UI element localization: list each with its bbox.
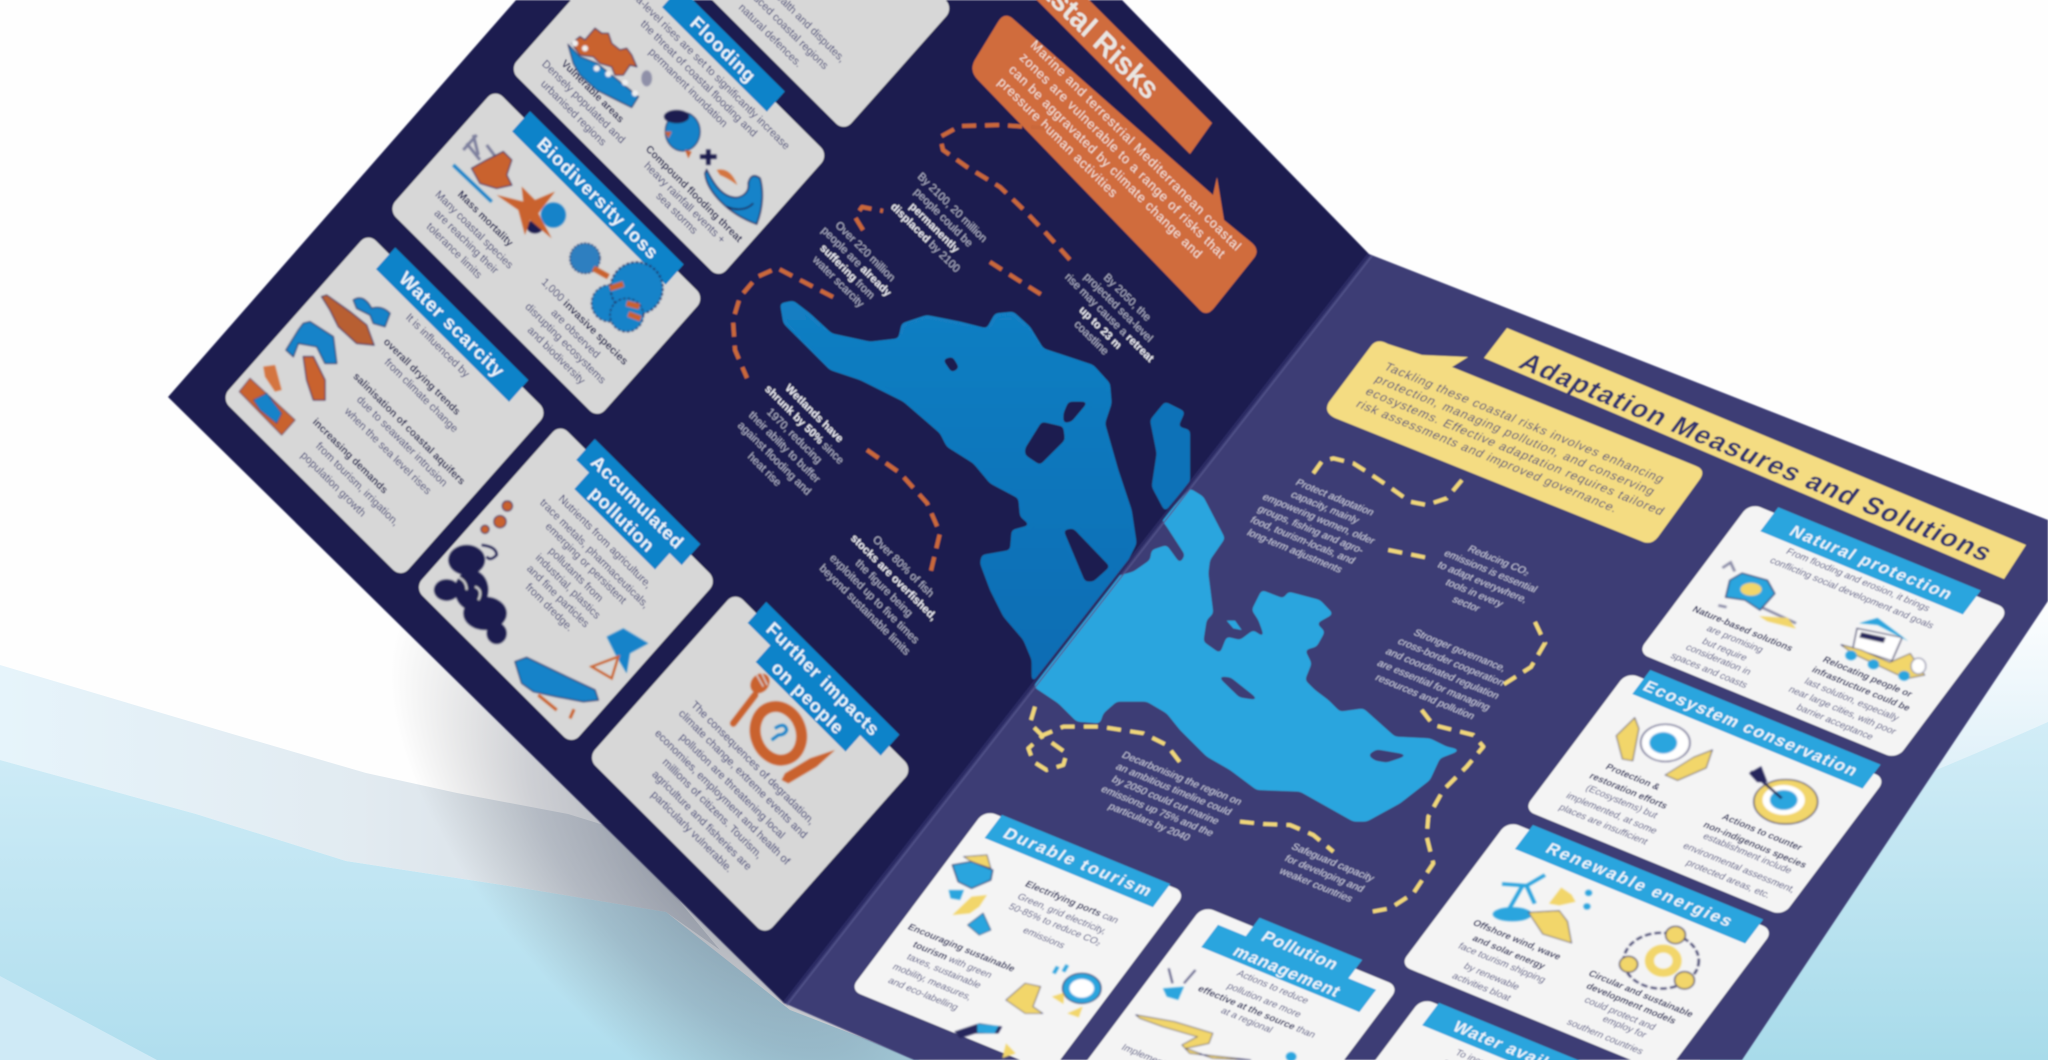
- card: Flooding: urbanised regions: [538, 78, 609, 149]
- card: Flooding: [509, 0, 838, 278]
- icon: walking tail: [954, 1023, 1016, 1058]
- stat: water scarcity: water scarcity: [810, 253, 866, 311]
- card: Further impacts on people: The consequences of degradation,: [689, 699, 816, 827]
- stat: wetlands: heat rise: [745, 450, 783, 489]
- stat: overfishing: Over 80% of fish: [870, 534, 936, 600]
- card: Further impacts on people: climate change, extreme events and: [676, 708, 809, 841]
- text: safeguard: weaker countries: [1276, 866, 1355, 904]
- intro box: orange: [972, 16, 1257, 313]
- card: Pollution management: pollution are more: [1224, 981, 1304, 1020]
- text: reducing emissions: sector: [1450, 595, 1483, 614]
- card: Renewable energies: southern countries: [1564, 1017, 1646, 1057]
- card: Renewable energies: activities bloat: [1449, 971, 1513, 1004]
- icon: plastic bottle: [515, 657, 598, 718]
- text: decarbonising: particulars by 2040: [1106, 802, 1192, 843]
- background: right blue swoosh: [1700, 722, 2048, 1060]
- icons: Flooding: [568, 28, 762, 224]
- text: safeguard: [1272, 842, 1377, 907]
- card: Accumulated pollution: from dredge.: [523, 581, 575, 634]
- card: Ecosystem conservation: non-indigenous species: [1701, 820, 1809, 871]
- card: Further impacts on people: particularly vulnerable.: [649, 789, 734, 875]
- stat: water scarcity: [801, 214, 903, 320]
- card: Natural protection: Relocating people or: [1820, 655, 1915, 700]
- text: protect capacity: food, tourism-locals, and: [1248, 515, 1357, 566]
- card: Ecosystem conservation: Actions to counter: [1719, 812, 1805, 853]
- card: Ecosystem conservation: protected areas, etc.: [1683, 858, 1773, 901]
- text: decarbonising: [1087, 750, 1244, 851]
- card: Renewable energies: and solar energy: [1470, 934, 1548, 972]
- ribbon: Flooding: [662, 0, 785, 112]
- stat: displaced people: By 2100, 20 million: [915, 170, 989, 245]
- map: right-page coastline: [1028, 458, 1483, 913]
- book cast shadow: [0, 300, 1100, 1060]
- dashed connector: upper right: [1498, 622, 1545, 688]
- card: Water availability: [1314, 996, 1682, 1060]
- icon: invasive lionfish: [570, 243, 663, 332]
- title ribbon: Adaptation Measures and Solutions: Adaptation Measures and Solutions: [1513, 348, 1998, 567]
- card: Natural protection: near large cities, with poor: [1786, 685, 1899, 737]
- stat: displaced people: [888, 170, 989, 275]
- card: Ecosystem conservation: environmental assessment,: [1680, 841, 1797, 895]
- text: decarbonising: emissions up 75% and the: [1098, 785, 1216, 839]
- text: protect capacity: empowering women, older: [1260, 492, 1378, 547]
- stat: water scarcity: suffering from: [818, 242, 877, 302]
- card: Further impacts on people: millions of citizens. Tourism,: [660, 756, 764, 861]
- card: Further impacts on people: agriculture and fisheries are: [649, 768, 753, 873]
- card: Water scarcity: overall drying trends: [381, 336, 463, 418]
- stat: overfishing: the figure being: [853, 557, 915, 620]
- ribbon: Renewable energies: Renewable energies: [1542, 840, 1736, 930]
- icon: circular economy gear: [1620, 926, 1699, 989]
- background band: pale left swoosh: [0, 665, 720, 950]
- text: decarbonising: an ambitious timeline could: [1113, 762, 1234, 818]
- card: Durable tourism: mobility, measures,: [890, 962, 974, 1003]
- stat: wetlands: Wetlands have: [783, 382, 845, 445]
- card: Accumulated pollution: [415, 414, 726, 745]
- card: Renewable energies: Circular and sustainable: [1586, 969, 1695, 1020]
- icon: cube and lightning: [949, 855, 993, 935]
- card: Pollution management: [1065, 897, 1406, 1060]
- card: Flooding: sea storms: [654, 190, 700, 237]
- card: Flooding: heavy rainfall events +: [642, 160, 727, 246]
- card: Ecosystem conservation: (Ecosystems) but: [1583, 783, 1660, 821]
- icon: fork: [733, 670, 773, 723]
- panel: left page: [168, 0, 1369, 1003]
- card: Flooding: Vulnerable areas: [559, 58, 626, 126]
- intro text: zones are vulnerable to a range of risks that: [1017, 49, 1228, 261]
- card: Durable tourism: [850, 808, 1187, 1060]
- stat: coastal retreat: up to 23 m: [1077, 304, 1124, 352]
- stat: wetlands: their ability to buffer: [746, 409, 822, 486]
- icon: storm cloud: [664, 110, 700, 158]
- stat: overfishing: exploited up to five times: [827, 552, 921, 647]
- card: Natural protection: are promising: [1704, 624, 1765, 655]
- text: safeguard: for developing and: [1282, 854, 1366, 895]
- card: Ecosystem conservation: restoration efforts: [1587, 771, 1670, 811]
- card: Flooding: Flooding: [687, 12, 760, 87]
- icon: dry soil frame: [239, 378, 295, 435]
- text: governance: Stronger governance,: [1411, 628, 1508, 674]
- stat: wetlands: shrunk by 50% since: [762, 383, 846, 467]
- ribbon: Pollution management: Pollution: [1258, 928, 1343, 973]
- icon: bleached coral: [453, 135, 512, 202]
- card: top cropped: natural defences.: [736, 2, 804, 70]
- card: Durable tourism: Green, grid electricity,: [1015, 892, 1109, 937]
- card: Water scarcity: from tourism, irrigation,: [313, 440, 401, 529]
- icon: puzzle with leaf: [1718, 562, 1796, 629]
- card: Accumulated pollution: Nutrients from agriculture,: [556, 493, 654, 591]
- card: Ecosystem conservation: [1524, 663, 1893, 916]
- card: Renewable energies: development models: [1584, 981, 1678, 1026]
- icon: target and arrow: [1749, 766, 1818, 824]
- card: Durable tourism: Encouraging sustainable: [905, 922, 1017, 974]
- card: Natural protection: consideration in: [1683, 643, 1753, 677]
- ribbon: Natural protection: [1760, 507, 1981, 614]
- card: Durable tourism: and eco-labelling: [885, 976, 961, 1013]
- ribbon: Natural protection: Natural protection: [1786, 522, 1956, 603]
- card: Flooding: permanent inundation: [646, 46, 729, 130]
- icon: plate: [748, 700, 809, 767]
- stat: wetlands: 1970, reducing: [764, 406, 824, 466]
- text: governance: resources and pollution: [1373, 673, 1477, 722]
- card: Further impacts on people: [588, 581, 923, 935]
- text: governance: are essential for managing: [1375, 659, 1493, 713]
- card: Durable tourism: Electrifying ports can: [1022, 879, 1121, 926]
- card: Renewable energies: Offshore wind, wave: [1470, 918, 1563, 962]
- card: Natural protection: [1638, 497, 2013, 759]
- ribbon: Water availability: [1422, 1003, 1666, 1060]
- text: protect capacity: capacity, mainly: [1288, 490, 1362, 526]
- text: reducing emissions: to adapt everywhere,: [1435, 560, 1529, 605]
- card: Pollution management: effective at the source than: [1195, 984, 1318, 1040]
- text: governance: cross-border cooperation: [1395, 637, 1506, 689]
- background band: blue lower left: [0, 760, 920, 1060]
- ribbon: Renewable energies: [1515, 825, 1763, 944]
- intro text: risk assessments and improved governance.: [1353, 397, 1621, 515]
- icons: Accumulated pollution and Further impacts: [434, 501, 835, 783]
- card: Renewable energies: [1400, 816, 1777, 1060]
- card: Water scarcity: population growth: [298, 449, 368, 520]
- ribbon: Accumulated pollution: pollution: [586, 482, 659, 557]
- card: Further impacts on people: economies, employment and health of: [652, 727, 792, 868]
- stat: overfishing: [817, 519, 951, 658]
- card: Durable tourism: tourism with green: [910, 940, 994, 981]
- icon: starfish: [497, 187, 566, 238]
- intro text: Marine and terrestrial Mediterranean coastal: [1028, 37, 1244, 254]
- icon: chemical splash: [592, 628, 648, 678]
- card: Accumulated pollution: pollutants from: [546, 545, 605, 605]
- text: protect capacity: long-term adjustments: [1244, 528, 1344, 575]
- card: Biodiversity loss: and biodiversity: [525, 324, 587, 387]
- stat: coastal retreat: projected sea-level: [1081, 271, 1155, 345]
- card: Renewable energies: employ for: [1600, 1014, 1649, 1041]
- ribbon: Biodiversity loss: [512, 111, 684, 285]
- stat: overfishing: beyond sustainable limits: [817, 562, 912, 658]
- card: Accumulated pollution: emerging or persistent: [543, 521, 628, 607]
- card: Natural protection: last solution, especially: [1802, 677, 1901, 724]
- icon: hands and globe: [1616, 718, 1712, 780]
- card: Ecosystem conservation: Protection &: [1603, 762, 1662, 793]
- card: Natural protection: conflicting social development and goals: [1767, 556, 1936, 631]
- intro box: yellow: [1327, 341, 1702, 543]
- icon: knife: [782, 750, 835, 783]
- text: protect capacity: Protect adaptation: [1293, 478, 1376, 518]
- text: reducing emissions: tools in every: [1443, 578, 1506, 610]
- card: Biodiversity loss: disrupting ecosystems: [523, 301, 608, 387]
- card: Flooding: Densely populated and: [539, 58, 627, 146]
- card: Water scarcity: It is influenced by: [403, 311, 472, 381]
- card: Biodiversity loss: Biodiversity loss: [533, 133, 663, 264]
- stat: wetlands: against flooding and: [735, 419, 813, 498]
- card: Natural protection: From flooding and erosion, it brings: [1783, 547, 1932, 614]
- panel: right page: [784, 254, 2048, 1060]
- intro text: protection, managing pollution, and conserving: [1372, 373, 1658, 498]
- ribbon: Further impacts on people: on people: [767, 657, 848, 739]
- icon: flooded city: [568, 28, 652, 107]
- icons: Water scarcity and Biodiversity: [239, 135, 663, 435]
- card: Biodiversity loss: Many coastal species: [433, 188, 515, 272]
- card: Water scarcity: salinisation of coastal aquifers: [351, 370, 467, 488]
- dashed connectors: yellow: [1028, 458, 1483, 913]
- fold crease: [784, 254, 1372, 1005]
- card: Durable tourism: 50-85% to reduce CO₂: [1006, 902, 1104, 948]
- card: Accumulated pollution: and fine particles: [524, 563, 591, 631]
- stat: water scarcity: Over 220 million: [833, 219, 897, 284]
- icon: polluted river: [1136, 968, 1296, 1060]
- icons: Natural, Ecosystem and Renewable: [1493, 562, 1926, 989]
- card: Flooding: the threat of coastal flooding and: [638, 18, 759, 140]
- stat: water scarcity: people are already: [819, 224, 894, 300]
- stat: displaced people: displaced by 2100: [888, 201, 962, 275]
- card: Water scarcity: due to seawater intrusion: [354, 394, 449, 489]
- card: Natural protection: spaces and coasts: [1668, 651, 1750, 691]
- card: Ecosystem conservation: implemented, at some: [1564, 791, 1660, 837]
- card: Natural protection: barrier acceptance: [1794, 703, 1876, 743]
- ribbon: Further impacts on people: [733, 602, 899, 772]
- card: Water scarcity: Water scarcity: [395, 268, 508, 383]
- card: Biodiversity loss: 1,000 invasive species: [539, 276, 630, 368]
- card: Renewable energies: could protect and: [1582, 995, 1658, 1033]
- stat: overfishing: stocks are overfished,: [848, 532, 938, 623]
- ribbon: Accumulated pollution: [562, 439, 700, 582]
- icon: wind turbine and solar: [1493, 875, 1592, 943]
- text: safeguard: Safeguard capacity: [1289, 842, 1377, 884]
- background: right pale area: [1700, 590, 2048, 790]
- ribbon: Durable tourism: [985, 815, 1170, 907]
- stat: wetlands: [723, 372, 856, 512]
- background band: light corner: [0, 976, 157, 1060]
- ribbon: Further impacts on people: Further impacts: [762, 618, 884, 741]
- card: Ecosystem conservation: places are insufficient: [1556, 803, 1650, 847]
- card: Flooding: Compound flooding threat: [643, 143, 745, 245]
- ribbon: Water scarcity: [376, 247, 528, 402]
- icon: plus: [700, 149, 717, 165]
- intro text: can be aggravated by climate change and: [1006, 62, 1205, 261]
- icon: smoke: [434, 545, 507, 644]
- card: Further impacts on people: pollution are threatening local: [677, 731, 787, 842]
- card: Biodiversity loss: Mass mortality: [455, 188, 515, 249]
- icons: Durable tourism and Pollution: [949, 855, 1296, 1060]
- card: top cropped: [634, 0, 954, 131]
- card: Water scarcity: increasing demands: [310, 416, 390, 497]
- ribbon: Pollution management: [1201, 906, 1390, 1012]
- stat: displaced people: permanently: [907, 200, 962, 256]
- text: protect capacity: groups, fishing and agro-: [1255, 504, 1366, 556]
- ribbon: Pollution management: management: [1229, 942, 1345, 1000]
- text: reducing emissions: [1417, 538, 1547, 628]
- text: governance: [1366, 624, 1519, 725]
- card: Natural protection: but require: [1699, 637, 1750, 664]
- text: decarbonising: by 2050 could cut marine: [1109, 775, 1221, 827]
- card: Pollution management: Actions to reduce: [1234, 969, 1311, 1006]
- text: decarbonising: Decarbonising the region on: [1119, 750, 1244, 808]
- dashed connectors: orange: [733, 125, 1072, 575]
- card: Biodiversity loss: are observed: [548, 307, 602, 361]
- stat: coastal retreat: By 2050, the: [1101, 271, 1153, 324]
- stat: coastal retreat: [1045, 251, 1174, 385]
- text: reducing emissions: Reducing CO₂: [1465, 544, 1532, 578]
- card: Natural protection: Nature-based solutions: [1690, 605, 1795, 654]
- map: small island: [1227, 621, 1242, 630]
- icon: truck with house: [1841, 618, 1926, 681]
- card: Pollution management: at a regional: [1218, 1006, 1275, 1035]
- stat: coastal retreat: coastline: [1072, 318, 1110, 358]
- icon: pollutant particles: [481, 501, 512, 533]
- stat: coastal retreat: rise may cause a retreat: [1062, 271, 1156, 365]
- card: Natural protection: infrastructure could be: [1809, 665, 1912, 714]
- ribbon: Ecosystem conservation: Ecosystem conservation: [1639, 678, 1862, 779]
- map: left-page coastline: [780, 301, 1190, 683]
- icon: tap: [286, 322, 337, 400]
- icon: jar: [322, 295, 390, 345]
- card: Water scarcity: when the sea level rises: [341, 405, 434, 498]
- text: reducing emissions: emissions is essential: [1441, 549, 1539, 595]
- card: Accumulated pollution: industrial, plastics: [533, 552, 603, 622]
- card: Durable tourism: taxes, sustainable: [904, 952, 984, 991]
- card: Ecosystem conservation: establishment include: [1700, 831, 1795, 876]
- text: protect capacity: [1236, 471, 1394, 579]
- card: Biodiversity loss: tolerance limits: [424, 221, 484, 282]
- stat: displaced people: people could be: [912, 186, 975, 250]
- text: governance: and coordinated regulation: [1383, 647, 1501, 702]
- card: Biodiversity loss: [388, 82, 711, 418]
- icon: wave: [705, 169, 762, 224]
- title ribbon: Coastal Risks: [1004, 0, 1212, 154]
- ribbon: Durable tourism: Durable tourism: [999, 825, 1156, 900]
- card: Renewable energies: by renewable: [1461, 961, 1522, 993]
- card: Renewable energies: face tourism shipping: [1456, 941, 1548, 985]
- intro text: pressure human activities: [995, 74, 1121, 201]
- icon: hotel blocks: [1006, 983, 1042, 1013]
- ribbon: Accumulated pollution: Accumulated: [587, 451, 688, 553]
- card: Water scarcity: [221, 226, 554, 578]
- card: Durable tourism: emissions: [1020, 926, 1067, 951]
- card: Biodiversity loss: are reaching their: [432, 207, 501, 277]
- card: Water scarcity: from climate change: [382, 356, 460, 435]
- card: Accumulated pollution: trace metals, pharmaceuticals,: [537, 497, 651, 611]
- icon: medal: [1052, 965, 1101, 1017]
- intro text: Tackling these coastal risks involves enhancing: [1381, 360, 1667, 485]
- intro text: ecosystems. Effective adaptation requires tailored: [1363, 385, 1667, 518]
- icon: bottle: [263, 365, 282, 392]
- map: eastern fragment: [1150, 402, 1190, 512]
